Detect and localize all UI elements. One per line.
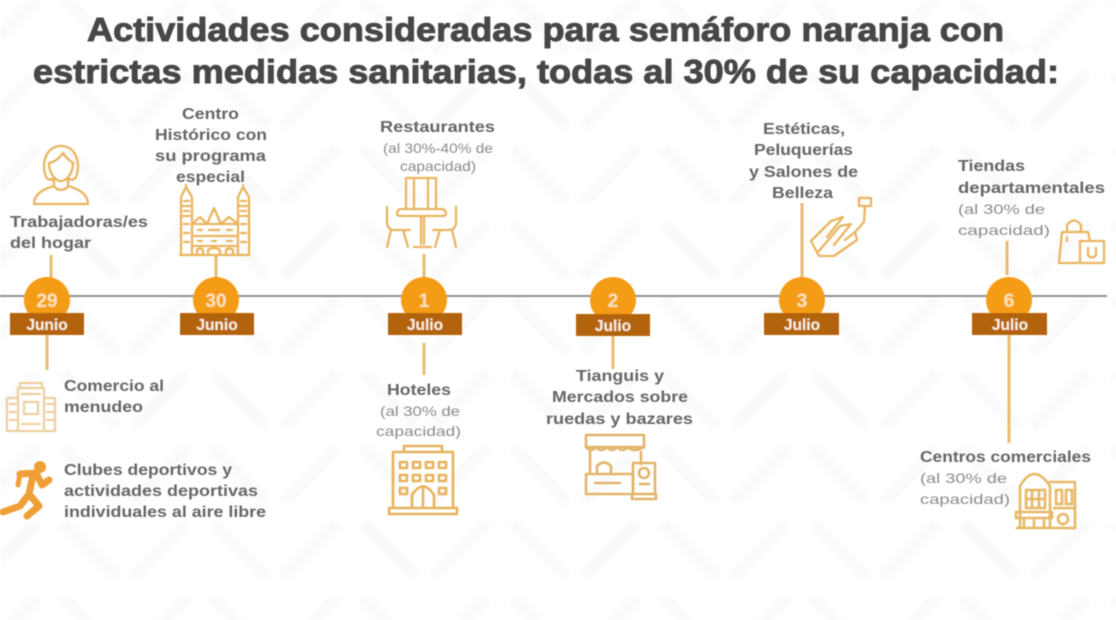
title xyxy=(33,11,1059,90)
date marker: 3 Julio xyxy=(764,277,839,335)
text: restaurantes xyxy=(380,119,495,174)
icon: manicure hand xyxy=(811,198,871,256)
icon: restaurant table xyxy=(387,178,456,247)
text: centros comerciales: Centros comerciales xyxy=(920,449,1091,466)
timeline axis xyxy=(0,295,1107,297)
date marker: 6 Julio: 6 xyxy=(1004,291,1014,312)
date marker: 6 Julio: Julio xyxy=(992,317,1028,334)
text: estéticas xyxy=(749,121,858,202)
text: clubes deportivos xyxy=(64,462,266,521)
text: trabajadoras xyxy=(10,214,148,252)
text: tiendas departamentales: capacidad) xyxy=(958,222,1050,238)
date marker: 1 Julio xyxy=(388,277,462,335)
date marker: 30 Junio: 30 xyxy=(205,291,227,312)
text: tianguis: ruedas y bazares xyxy=(546,411,693,428)
connector lines xyxy=(47,203,1009,443)
text: hoteles: capacidad) xyxy=(376,423,461,439)
text: hoteles: Hoteles xyxy=(387,382,451,399)
icon: retail building xyxy=(7,383,55,431)
date marker: 6 Julio xyxy=(972,277,1047,335)
icon: woman xyxy=(34,146,88,204)
date marker: 30 Junio: Junio xyxy=(196,317,238,334)
text: trabajadoras: del hogar xyxy=(10,235,91,252)
text: comercio al menudeo: Comercio al xyxy=(64,378,164,395)
text: centros comerciales: capacidad) xyxy=(920,491,1010,507)
date marker: 1 Julio: 1 xyxy=(419,291,430,312)
text: centro histórico: su programa xyxy=(155,148,266,165)
text: centro histórico: Centro xyxy=(182,106,239,123)
text: restaurantes: capacidad) xyxy=(400,158,476,174)
icon: shopping mall xyxy=(1016,474,1075,528)
title: Actividades consideradas para semáforo naranja con xyxy=(87,11,1004,48)
text: comercio al menudeo: menudeo xyxy=(64,399,143,416)
text: tiendas departamentales xyxy=(958,158,1105,238)
text: tiendas departamentales: Tiendas xyxy=(958,158,1025,175)
text: restaurantes: (al 30%-40% de xyxy=(383,140,493,156)
text: hoteles xyxy=(376,382,461,439)
text: centro histórico: Histórico con xyxy=(155,127,267,144)
date marker: 3 Julio: 3 xyxy=(797,291,807,312)
text: tianguis: Mercados sobre xyxy=(552,389,688,406)
text: comercio al menudeo xyxy=(64,378,164,416)
text: tianguis: Tianguis y xyxy=(576,368,664,385)
date marker: 30 Junio xyxy=(180,277,254,335)
date marker: 2 Julio xyxy=(576,277,650,336)
text: hoteles: (al 30% de xyxy=(380,403,460,419)
text: clubes deportivos: Clubes deportivos y xyxy=(64,462,232,479)
text: trabajadoras: Trabajadoras/es xyxy=(10,214,148,231)
icon: cathedral xyxy=(180,185,249,255)
icon: runner xyxy=(3,461,49,516)
text: centros comerciales: (al 30% de xyxy=(920,470,1007,486)
text: centro histórico: especial xyxy=(176,169,245,186)
date marker: 29 Junio: Junio xyxy=(26,317,68,334)
date marker: 2 Julio: Julio xyxy=(595,318,631,335)
text: estéticas: Belleza xyxy=(772,185,833,202)
text: tianguis xyxy=(546,368,693,428)
text: clubes deportivos: individuales al aire libre xyxy=(64,504,266,521)
text: restaurantes: Restaurantes xyxy=(380,119,495,136)
icon: hotel xyxy=(389,446,457,514)
text: centro histórico xyxy=(155,106,267,186)
date marker: 29 Junio: 29 xyxy=(36,291,58,312)
text: tiendas departamentales: (al 30% de xyxy=(958,201,1045,217)
text: centros comerciales xyxy=(920,449,1091,507)
text: estéticas: Peluquerías xyxy=(754,142,853,159)
text: tiendas departamentales: departamentales xyxy=(958,180,1105,197)
icon: shopping bags xyxy=(1059,220,1104,263)
date marker: 2 Julio: 2 xyxy=(608,291,618,312)
date marker: 1 Julio: Julio xyxy=(407,317,443,334)
title: estrictas medidas sanitarias, todas al 30% de su capacidad: xyxy=(33,53,1059,90)
date marker: 3 Julio: Julio xyxy=(784,317,820,334)
text: estéticas: Estéticas, xyxy=(763,121,845,138)
icon: market stall xyxy=(586,435,656,499)
text: estéticas: y Salones de xyxy=(749,164,858,181)
date marker: 29 Junio xyxy=(10,277,84,335)
text: clubes deportivos: actividades deportivas xyxy=(64,483,258,500)
